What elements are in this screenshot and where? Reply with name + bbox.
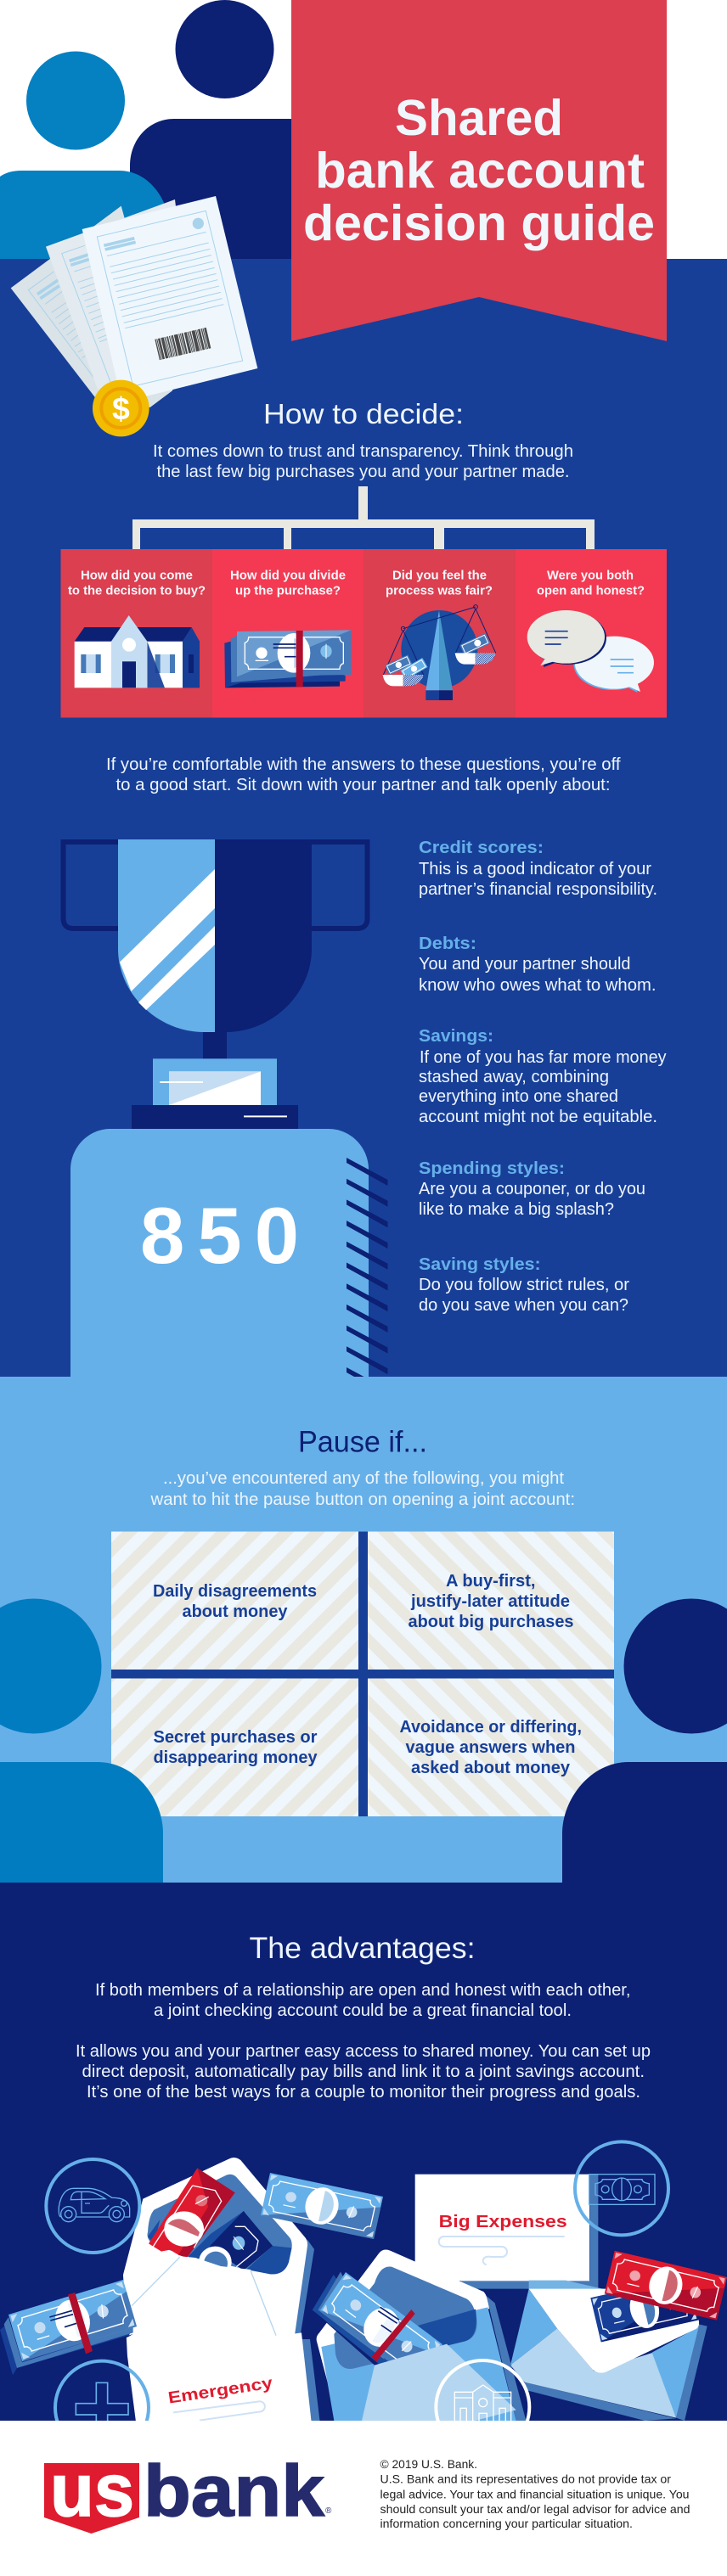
card text: divide [230,569,346,598]
heading: how to decide: How to decide: [263,398,464,429]
warning: buy-first: A buy-first, [446,1572,535,1591]
panel: warning grid [111,1531,614,1816]
icon: speech bubbles [527,610,654,693]
item: spending styles [419,1159,645,1219]
person: blue [0,51,174,259]
card text: fair [386,569,493,598]
icon circle: house [436,2360,529,2454]
bill: red in left envelope [149,2168,235,2258]
trophy plinth [70,1129,369,1392]
title [303,90,655,251]
card text: fair: Did you feel the [392,569,487,582]
person: right [562,1599,727,1883]
icon circle: money [575,2141,668,2235]
item: debts: You and your partner should [419,955,630,974]
bill: blue in right envelope [590,2276,698,2342]
pause intro text: want to hit the pause button on opening a joint account: [149,1490,575,1509]
card text: divide: up the purchase? [235,584,341,598]
advantages text 1 [95,1981,630,2020]
legal disclaimer: information concerning your particular situation. [380,2517,633,2530]
icon: coin [93,380,149,436]
footer panel [0,2421,727,2576]
item: debts: know who owes what to whom. [419,976,656,995]
text: comfortable with answers: to a good start. Sit down with your partner and talk openly about: [116,776,610,794]
logo: U.S. Bank: bank [144,2451,325,2532]
person: navy [130,0,291,259]
card text: decision: to the decision to buy? [68,584,206,598]
pause intro text [149,1469,575,1509]
item: savings: stashed away, combining [419,1068,609,1086]
card text: decision: How did you come [81,569,193,582]
advantages text 2: direct deposit, automatically pay bills and link it to a joint savings account. [82,2062,645,2081]
middle pocket, band and icon circle [362,2307,529,2454]
intro text: It comes down to trust and transparency. Think through [153,442,573,461]
icon circle: medical cross [55,2361,149,2455]
warning: secret purchases [153,1728,318,1767]
warning: buy-first: justify-later attitude [410,1592,570,1611]
list: topics to discuss [419,839,666,1315]
pause intro text: ...you’ve encountered any of the following, you might [163,1469,564,1488]
legal disclaimer: U.S. Bank and its representatives do not provide tax or [380,2472,671,2485]
item: credit scores: This is a good indicator of your [419,860,651,878]
trophy illustration [63,839,387,1395]
light blue section background [0,1377,727,1883]
blue section background [0,259,727,1377]
warning: secret purchases: disappearing money [153,1748,318,1767]
card text: decision [68,569,206,598]
item: debts: Debts: [419,934,476,953]
advantages text 2 [76,2042,651,2102]
icon: money stack [224,630,351,687]
trophy handles [63,842,367,929]
trophy stem and base [132,1032,298,1129]
item: saving styles: Do you follow strict rules, or [419,1276,629,1294]
item: saving styles: Saving styles: [419,1255,541,1274]
heading: the advantages: The advantages: [250,1932,476,1965]
left envelope pocket [123,2256,300,2357]
warning: daily disagreements: about money [182,1602,288,1621]
legal disclaimer: should consult your tax and/or legal advisor for advice and [380,2502,690,2516]
illustration: money stack left [0,2317,133,2375]
text: comfortable with answers: If you’re comfortable with the answers to these questions, you’re off [106,755,621,774]
card: emergency [127,2332,312,2422]
envelope side shade [302,2339,320,2422]
title: Shared [395,90,563,146]
advantages text 2: It allows you and your partner easy access to shared money. You can set up [76,2042,651,2061]
title: bank account [315,143,645,199]
item: spending styles: Spending styles: [419,1159,565,1178]
card shadow [461,2175,598,2289]
warning: buy-first: about big purchases [408,1613,574,1631]
intro text [153,442,573,481]
text: comfortable with answers [106,755,621,794]
logo: U.S. Bank [44,2448,332,2534]
advantages text 1: If both members of a relationship are open and honest with each other, [95,1981,630,2000]
header background with two people [0,0,727,259]
advantages text 1: a joint checking account could be a great financial tool. [154,2001,572,2020]
title: decision guide [303,195,655,251]
bill: navy in left envelope [199,2211,273,2277]
warning: avoidance: asked about money [411,1759,571,1777]
icon circle: car [46,2159,139,2253]
connector tree [132,486,595,549]
bill: blue top [261,2173,383,2239]
bill: left stack top [8,2280,137,2361]
item: spending styles: Are you a couponer, or do you [419,1180,645,1198]
right envelope [510,2281,707,2421]
illustration: middle envelope [313,2250,526,2421]
warning: secret purchases: Secret purchases or [153,1728,318,1747]
item: savings: everything into one shared [419,1087,618,1106]
bill: red in right envelope [605,2251,727,2321]
bill band and marks [49,2293,93,2354]
warning: daily disagreements: Daily disagreements [153,1582,317,1601]
warning: buy-first [408,1572,574,1631]
legal disclaimer [380,2457,690,2530]
item: savings: Savings: [419,1027,493,1046]
item: savings [419,1027,666,1126]
warning: daily disagreements [153,1582,317,1621]
advantages text 2: It’s one of the best ways for a couple to monitor their progress and goals. [87,2083,640,2102]
navy section background [0,1883,727,2426]
icon: coin: $ [112,390,130,426]
trophy cup [118,839,312,1032]
warning: avoidance: vague answers when [406,1738,576,1757]
card text: honest: Were you both [547,569,634,582]
title ribbon [291,0,667,341]
plinth edge stripes [347,1158,387,1395]
card text: fair: process was fair? [386,584,493,598]
item: savings: account might not be equitable. [419,1108,657,1126]
warning: avoidance [399,1718,582,1777]
credit score number: 850 [140,1191,299,1280]
logo: U.S. Bank: ® [325,2506,332,2516]
person: left [0,1599,163,1883]
icon: papers and coin [11,196,257,436]
card: big expenses [415,2175,589,2281]
item: saving styles [419,1255,629,1315]
card text: honest [537,569,645,598]
card: emergency: Emergency [167,2374,274,2408]
panel: question cards [61,549,667,718]
intro text: the last few big purchases you and your partner made. [156,463,569,481]
item: spending styles: like to make a big splash? [419,1200,614,1219]
legal disclaimer: © 2019 U.S. Bank. [380,2457,477,2471]
heading: pause if: Pause if... [298,1426,427,1458]
card text: divide: How did you divide [230,569,346,582]
illustration: big expenses card and right envelope [415,2175,707,2421]
card text: honest: open and honest? [537,584,645,598]
item: saving styles: do you save when you can? [419,1296,628,1315]
logo: U.S. Bank: us [50,2448,134,2532]
legal disclaimer: legal advice. Your tax and financial situation is unique. You [380,2487,690,2500]
icon: house [75,615,200,687]
item: savings: If one of you has far more money [420,1048,666,1067]
card: big expenses: Big Expenses [439,2213,567,2231]
item: credit scores: partner’s financial responsibility. [419,880,657,899]
icon: balance scale [383,605,496,700]
warning: avoidance: Avoidance or differing, [399,1718,582,1737]
item: credit scores: Credit scores: [419,839,544,857]
item: credit scores [419,839,657,899]
item: debts [419,934,656,995]
illustration: left envelope [123,2158,320,2422]
bill: middle stack top [320,2272,442,2382]
